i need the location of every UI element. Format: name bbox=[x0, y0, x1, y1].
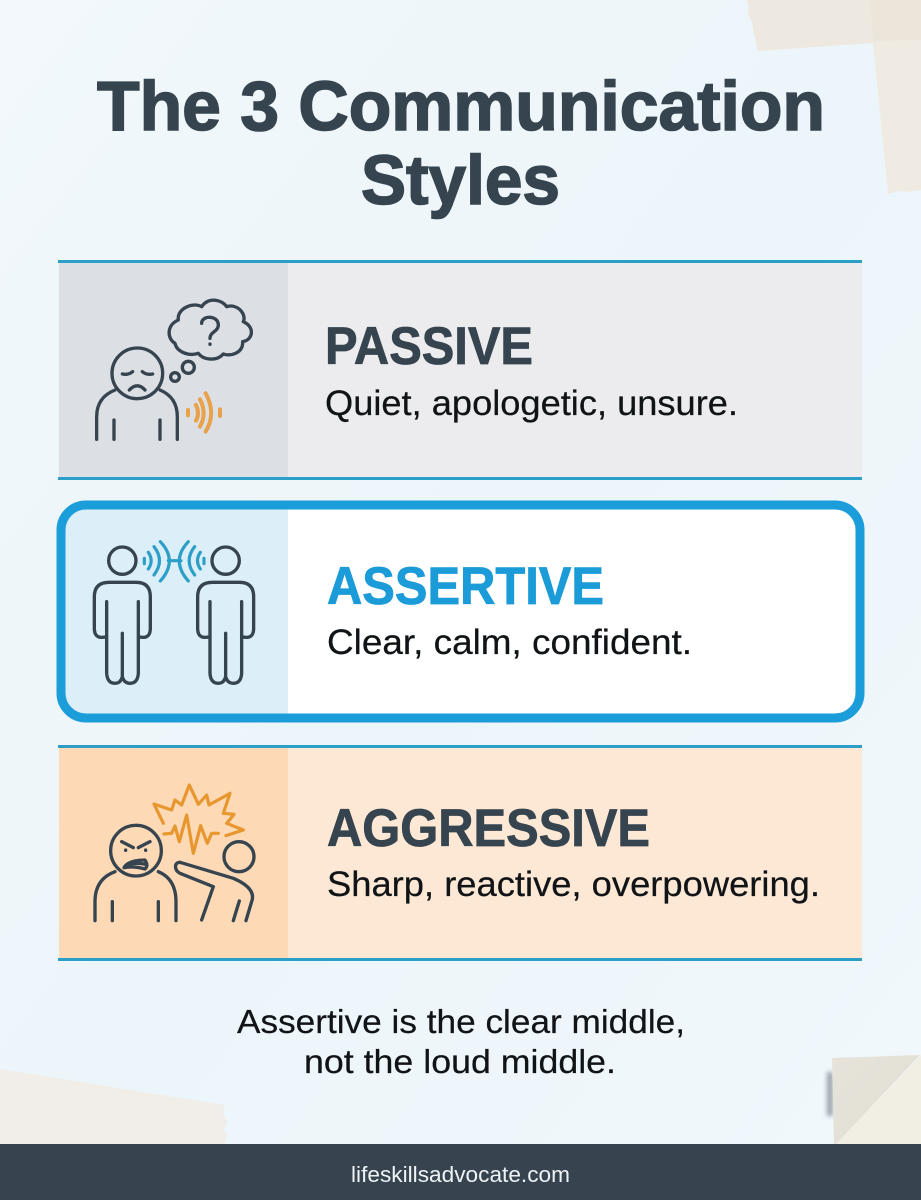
icon: angry person and burst bbox=[95, 785, 254, 921]
title bbox=[97, 67, 825, 219]
assertive heading: ASSERTIVE bbox=[327, 557, 604, 616]
passive heading: PASSIVE bbox=[325, 317, 533, 376]
title: The 3 Communication bbox=[97, 67, 825, 145]
icon: two people exchanging sound waves bbox=[94, 542, 254, 683]
passive description: Quiet, apologetic, unsure. bbox=[325, 384, 738, 423]
curled paper corner: bottom right bbox=[827, 1055, 921, 1144]
panel: aggressive bbox=[58, 745, 862, 961]
closing statement: not the loud middle. bbox=[304, 1043, 616, 1080]
footer url: lifeskillsadvocate.com bbox=[351, 1162, 570, 1187]
aggressive description: Sharp, reactive, overpowering. bbox=[327, 865, 820, 904]
closing statement bbox=[237, 1003, 685, 1080]
panel: passive bbox=[58, 260, 862, 480]
aggressive heading: AGGRESSIVE bbox=[327, 799, 650, 858]
footer bar bbox=[0, 1144, 921, 1200]
assertive description: Clear, calm, confident. bbox=[327, 623, 692, 662]
sound waves bbox=[144, 542, 204, 581]
left figure bbox=[94, 547, 150, 683]
icon: sad person with thought cloud and quiet sound bbox=[97, 300, 251, 439]
title: Styles bbox=[361, 141, 560, 219]
closing statement: Assertive is the clear middle, bbox=[237, 1003, 685, 1040]
panel: assertive bbox=[61, 505, 860, 718]
torn tape: bottom left bbox=[0, 1069, 227, 1144]
torn tape: top right bbox=[747, 0, 921, 194]
right figure bbox=[198, 547, 254, 683]
